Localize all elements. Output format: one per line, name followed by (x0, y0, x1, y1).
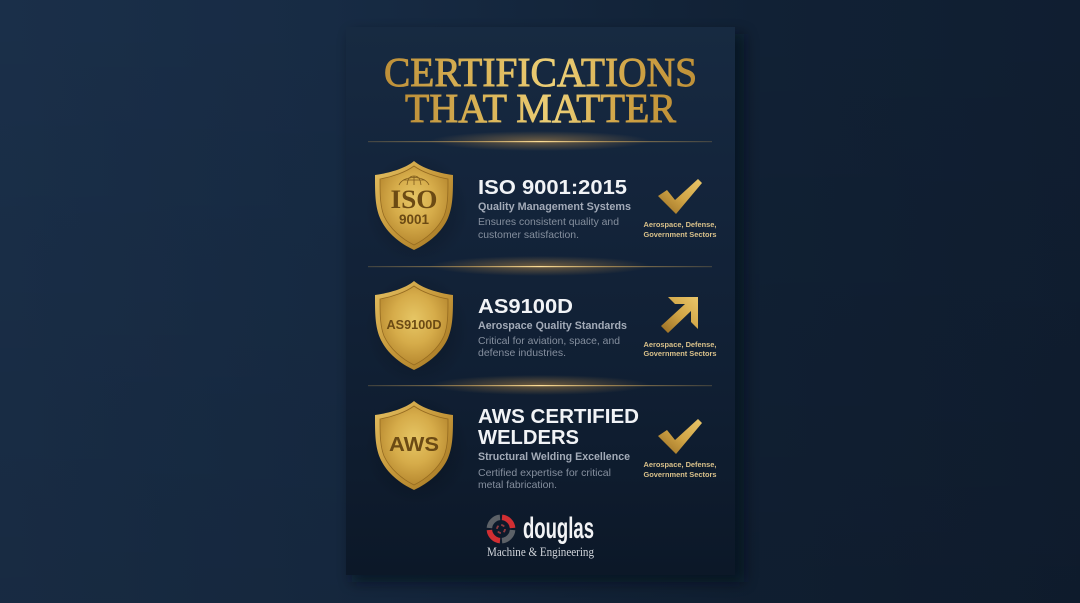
description: AS9100D: Critical for aviation, space, and (478, 335, 620, 347)
sector label: AWS: Aerospace, Defense, (644, 460, 716, 469)
icon: ISO shield: 9001 (399, 212, 430, 227)
description: ISO: Ensures consistent quality and (478, 216, 619, 228)
icon: AS9100D shield: AS9100D (386, 317, 442, 332)
title: THAT MATTER (405, 85, 677, 131)
description: AWS: metal fabrication. (478, 479, 557, 491)
sector label: ISO: Government Sectors (644, 230, 716, 239)
icon: target logo mark (489, 517, 513, 541)
heading: AWS certified welders: AWS CERTIFIED (478, 405, 639, 428)
description: AWS (478, 467, 611, 491)
sector label: AWS: Government Sectors (644, 470, 716, 479)
heading: AWS certified welders (478, 405, 639, 449)
subheading: structural welding: Structural Welding Excellence (478, 451, 630, 463)
logo: Douglas Machine & Engineering (487, 512, 595, 559)
subheading: quality management: Quality Management Systems (478, 201, 631, 213)
panel: poster (346, 27, 735, 575)
icon: ISO shield (365, 153, 469, 265)
title (384, 49, 697, 131)
icon: AWS shield: AWS (389, 434, 439, 456)
tagline: Machine & Engineering (487, 545, 595, 559)
sector label: AS9100D: Aerospace, Defense, (644, 340, 716, 349)
panel: ISO 9001 (365, 153, 716, 265)
divider: row one (368, 256, 712, 276)
icon: check mark (658, 419, 702, 454)
icon: up arrow (661, 297, 698, 333)
wordmark: douglas: douglas (523, 512, 594, 545)
description: AS9100D: defense industries. (478, 347, 566, 359)
icon: check mark (658, 179, 702, 214)
sector label: ISO (644, 220, 716, 239)
icon: ISO shield: ISO (390, 185, 438, 214)
divider: row two (368, 375, 712, 395)
poster shadow (352, 34, 744, 582)
title: CERTIFICATIONS (384, 49, 697, 95)
sector label: AWS (644, 460, 716, 479)
sector label: AS9100D: Government Sectors (644, 349, 716, 358)
description: ISO: customer satisfaction. (478, 229, 579, 241)
sector label: AS9100D (644, 340, 716, 358)
icon: AS9100D shield (365, 273, 469, 385)
description: AS9100D (478, 335, 620, 359)
description: AWS: Certified expertise for critical (478, 467, 611, 479)
description: ISO (478, 216, 619, 241)
icon: AWS shield (365, 393, 469, 505)
subheading: aerospace quality: Aerospace Quality Standards (478, 320, 627, 332)
heading: ISO 9001:2015: ISO 9001:2015 (478, 176, 627, 199)
sector label: ISO: Aerospace, Defense, (644, 220, 716, 229)
heading: AWS certified welders: WELDERS (478, 426, 579, 449)
heading: AS9100D: AS9100D (478, 295, 573, 318)
panel: AS9100D (365, 273, 716, 385)
panel: AWS (365, 393, 716, 505)
divider: title (368, 131, 712, 151)
